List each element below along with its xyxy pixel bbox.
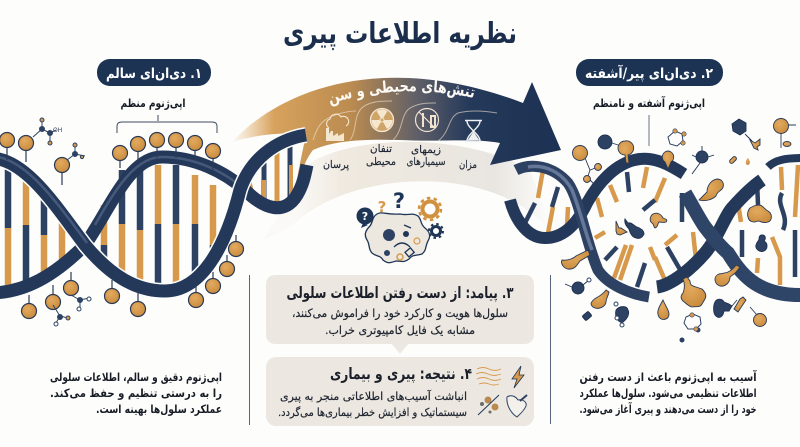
- label: environmental toxins: محیطی: [366, 156, 396, 168]
- card 3 body: [292, 306, 508, 338]
- pill: healthy DNA heading: ۱. دی‌ان‌ای سالم: [106, 66, 202, 82]
- text block: healthy explanation: اپی‌ژنوم دقیق و سالم، اطلاعات سلولی: [50, 370, 222, 385]
- subtitle: ordered epigenome: اپی‌ژنوم منظم: [120, 96, 186, 111]
- small molecules: [33, 118, 91, 326]
- card 4 body: انباشت آسیب‌های اطلاعاتی منجر به پیری: [280, 389, 467, 403]
- label: OH: OH: [53, 127, 62, 134]
- text block: healthy explanation: [50, 370, 222, 417]
- molecule fragments: navy: [565, 119, 767, 322]
- card 3 body: سلول‌ها هویت و کارکرد خود را فراموش می‌کنند،: [292, 306, 508, 321]
- icon: lightning: [512, 366, 524, 388]
- strand: front ribbon: [516, 166, 649, 297]
- panel: damaged DNA helix: [510, 118, 800, 342]
- strand: back left: [510, 159, 684, 238]
- card 4 body: [278, 389, 467, 419]
- subtitle: disordered epigenome: اپی‌ژنوم آشفته و نامنظم: [593, 96, 705, 111]
- gears: [422, 202, 438, 216]
- card 3 heading: ۳. پیامد: از دست رفتن اطلاعات سلولی: [286, 284, 514, 303]
- strand: top right: [768, 158, 800, 167]
- molecule fragments: orange: [562, 118, 796, 326]
- strand back: [0, 157, 307, 293]
- icon: hourglass: [465, 120, 482, 142]
- strand front: [0, 135, 306, 291]
- strand: lower crossing: [657, 180, 762, 287]
- arrow: environmental stress: تنش‌های محیطی و سن: [330, 80, 475, 106]
- divider: [250, 275, 550, 425]
- label: prsan: پرسان: [323, 159, 349, 171]
- swoosh beneath arrow: [262, 142, 556, 240]
- title: نظریه اطلاعات پیری: [283, 16, 517, 51]
- icon: sad cell with question marks and gears: ?: [362, 210, 368, 223]
- arrow labels: [323, 143, 477, 171]
- cell body: [365, 213, 430, 263]
- icon: radiation: [370, 108, 394, 132]
- broken rungs: [525, 165, 798, 287]
- bracket: [117, 115, 217, 133]
- arrow: environmental stress: [233, 78, 561, 180]
- label: environmental toxins: تنفان: [370, 143, 392, 155]
- icon: heart: [507, 395, 527, 417]
- card 3 body: مشابه یک فایل کامپیوتری خراب.: [325, 323, 475, 338]
- molecule fragments: rings: [587, 131, 701, 329]
- text block: healthy explanation: را به درستی تنظیم و حفظ می‌کند.: [50, 386, 222, 401]
- label: environmental toxins: [366, 143, 396, 168]
- pointer line: [648, 115, 650, 146]
- label: microbes: سیمیارهای: [406, 156, 446, 168]
- rungs: healthy DNA: [8, 142, 291, 290]
- text block: healthy explanation: عملکرد سلول‌ها بهینه است.: [96, 402, 222, 417]
- text block: damage explanation: [580, 370, 757, 417]
- label: mezan: مزان: [459, 159, 477, 171]
- strand: upper crossing: [685, 193, 800, 295]
- label: microbes: زیمهای: [411, 144, 441, 156]
- text block: damage explanation: آسیب به اپی‌ژنوم باعث از دست رفتن: [580, 370, 757, 385]
- icon: no food: [416, 108, 438, 132]
- icon: waves: [476, 368, 501, 385]
- arrow heading: [329, 91, 474, 104]
- icon: factory cloud: [326, 114, 349, 141]
- panel: card 3 outcome: [266, 275, 534, 354]
- pill: aged DNA heading: [576, 59, 723, 86]
- scallop separators: [313, 101, 497, 141]
- icon: sad cell with question marks and gears: [356, 189, 443, 263]
- pill: healthy DNA heading: [97, 59, 211, 86]
- icon: sad cell with question marks and gears: ?: [378, 198, 386, 216]
- pill: aged DNA heading: ۲. دی‌ان‌ای پیر/آشفته: [585, 64, 713, 82]
- icon: crossed particles: [478, 395, 499, 415]
- methyl balls: [0, 132, 244, 318]
- label: microbes: [406, 144, 446, 168]
- question marks: ?: [393, 189, 405, 213]
- card 4 heading: ۴. نتیجه: پیری و بیماری: [330, 365, 472, 384]
- card 4 body: سیستماتیک و افزایش خطر بیماری‌ها می‌گردد.: [278, 406, 467, 419]
- panel: card 4 result: [266, 357, 534, 426]
- panel: healthy DNA helix: [0, 118, 307, 326]
